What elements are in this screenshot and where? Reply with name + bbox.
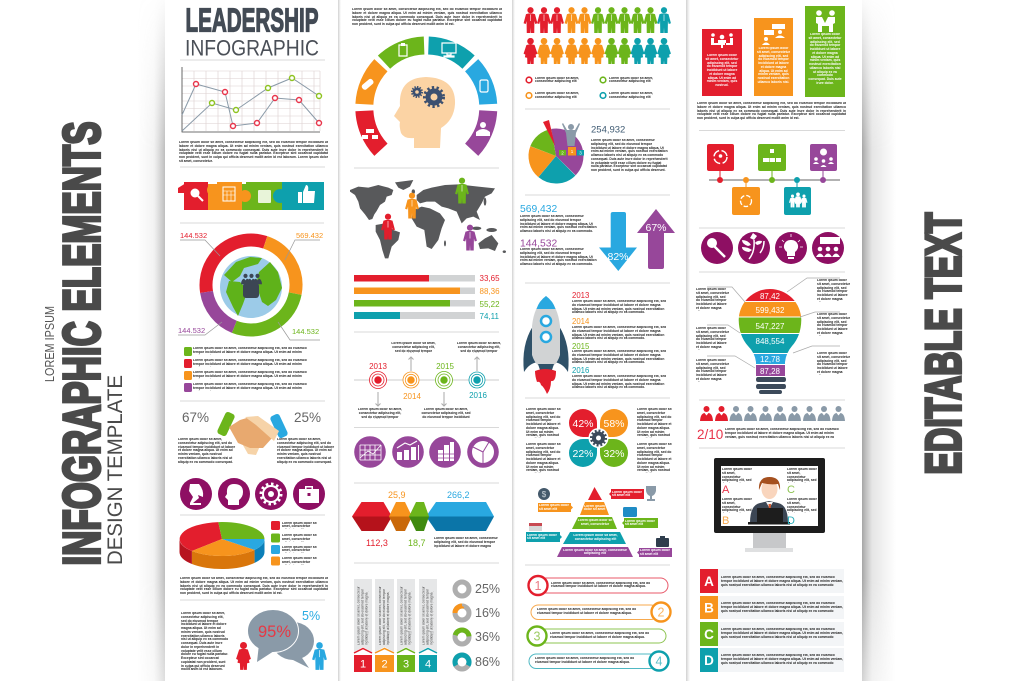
monitor with presenter: A — [722, 484, 730, 496]
icon row: charts — [354, 436, 499, 468]
light bulb chart: 599,432 — [756, 306, 785, 315]
cards: three coloured boxes — [702, 6, 845, 97]
icon: woman — [237, 642, 250, 670]
timeline — [354, 342, 503, 419]
light bulb chart — [696, 278, 850, 394]
icon: winner on podium — [559, 123, 584, 156]
petal percentages: 58% — [603, 418, 625, 430]
people legend — [526, 76, 671, 100]
cards: three coloured boxes: Lorem ipsum dolor sit amet, consectetur adipiscing elit, sed do eiusmod tempor incididunt ut labore et dolore magna aliqua. Ut enim ad minim veniam, quis nostrud. — [706, 54, 738, 87]
timeline: 2013 — [369, 362, 387, 371]
lettered list: A — [704, 574, 714, 589]
monitor with presenter — [714, 458, 825, 552]
icon: people — [241, 274, 262, 298]
figures and arrows: 67% — [645, 222, 667, 234]
handshake stat: 67% — [182, 410, 209, 425]
icon: briefcase — [656, 536, 669, 547]
ring percentages: 36% — [475, 630, 500, 644]
light bulb chart: 547,227 — [756, 322, 785, 331]
panel: column four — [696, 6, 850, 672]
icon: coin: $ — [542, 490, 547, 499]
light bulb chart: 87,42 — [760, 292, 781, 301]
icon: winner on podium: 1 — [571, 149, 574, 154]
ring of segments with head — [339, 20, 514, 195]
year milestones — [572, 291, 669, 390]
figures and arrows: 144,532 — [520, 238, 557, 250]
horizontal bars: 74,11 — [480, 312, 499, 321]
cards: three coloured boxes: Lorem ipsum dolor sit amet, consectetur adipiscing elit, sed do eiusmod tempor incididunt ut labore et dolore magna aliqua. Ut enim ad minim veniam, quis nostrud exercitation ullamco laboris nisi ut aliquip ex ea commodo consequat. Duis aute irure dolor. — [808, 33, 842, 85]
icon row: strategy, head, gear, briefcase — [180, 478, 325, 510]
horizontal bars — [354, 274, 500, 321]
monitor with presenter: B — [722, 515, 729, 527]
donut legend — [184, 347, 313, 392]
petal percentages — [526, 408, 673, 473]
year milestones: 2013 — [572, 291, 589, 300]
horizontal bars: 33,65 — [480, 274, 500, 283]
lettered list: B — [704, 600, 714, 616]
numbered capsules: 1 — [535, 579, 542, 593]
page shadows — [137, 0, 896, 681]
speech bubbles — [248, 609, 320, 668]
panel: column three — [520, 7, 675, 671]
side heading: design template: DESIGN TEMPLATE — [103, 375, 127, 565]
numbered capsules: 2 — [658, 606, 665, 620]
gears — [412, 87, 444, 106]
line chart — [182, 67, 322, 132]
icon: winner on podium: 3 — [579, 150, 582, 156]
donut chart with globe: 569.432 — [296, 231, 323, 240]
petal percentages: 32% — [603, 448, 625, 460]
donut chart with globe: 144.532 — [180, 231, 207, 240]
3D hex arrows: 18,7 — [408, 538, 426, 548]
puzzle strip — [178, 182, 324, 210]
panel: column two — [339, 8, 514, 672]
ring percentages: 25% — [475, 582, 500, 596]
pie chart with podium: Lorem ipsum dolor sit amet, consectetur adipiscing elit, sed do eiusmod tempor incididunt ut labore et dolore magna aliqua. Ut enim ad minim veniam, quis nostrud exercitation ullamco laboris nisi ut aliquip ex ea commodo consequat. Duis aute irure dolor in reprehenderit in voluptate velit esse cillum dolore eu fugiat nulla pariatur. Excepteur sint occaecat cupidatat non proident, sunt in culpa qui officia deserunt. — [591, 139, 668, 172]
lettered list — [700, 569, 844, 672]
figures and arrows: 82% — [607, 251, 629, 263]
icon: calendar — [529, 523, 542, 531]
icon: wallet — [623, 507, 637, 517]
numbered vertical cards: 3 — [403, 658, 409, 670]
horizontal bars: 88,36 — [480, 287, 500, 296]
arrow: down — [599, 212, 637, 271]
year milestones: 2016 — [572, 366, 589, 375]
donut chart with globe: 144.532 — [292, 327, 319, 336]
icon: rocket — [523, 296, 569, 394]
presenter — [748, 477, 790, 524]
icon row: key, plant, bulb, team — [701, 232, 844, 264]
cards: three coloured boxes: Lorem ipsum dolor sit amet, consectetur adipiscing elit, sed do eiusmod tempor incididunt ut labore et dolore magna aliqua. Ut enim ad minim veniam, quis nostrud exercitation ullamco laboris nisi. — [757, 47, 790, 84]
lettered list: D — [704, 653, 714, 668]
globe — [220, 256, 282, 318]
handshake stat — [178, 410, 335, 468]
arrow: up — [637, 209, 675, 269]
light bulb chart: 87,28 — [760, 367, 781, 376]
petal percentages: 22% — [572, 448, 594, 460]
light bulb chart: 12,78 — [760, 355, 781, 364]
timeline: 2016 — [469, 391, 487, 400]
pie chart with podium: 254,932 — [591, 124, 625, 136]
numbered vertical cards: 1 — [360, 658, 366, 670]
monitor with presenter: D — [787, 515, 795, 527]
speech bubbles: 5% — [302, 609, 320, 623]
numbered vertical cards: 2 — [381, 658, 388, 670]
3D hex arrows — [352, 490, 499, 548]
side heading: lorem ipsum: LOREM IPSUM — [43, 306, 57, 382]
head — [394, 77, 455, 148]
title: leadership: LEADERSHIP — [186, 2, 318, 40]
segment icons — [361, 43, 490, 139]
lettered list: C — [704, 627, 714, 642]
side heading: editable text: EDITABLE TEXT — [916, 212, 972, 474]
monitor with presenter: C — [787, 484, 795, 496]
donut chart with globe — [178, 227, 323, 343]
numbered capsules — [528, 576, 670, 670]
icon: winner on podium: 2 — [561, 150, 564, 156]
3D hex arrows: 112,3 — [366, 538, 388, 548]
panel: column one — [178, 2, 335, 672]
year milestones: 2014 — [572, 317, 590, 326]
figures and arrows: 569,432 — [520, 204, 557, 215]
3D hex arrows: 266,2 — [447, 490, 470, 500]
icon: trophy — [646, 486, 656, 501]
numbered capsules: 3 — [534, 630, 541, 644]
figures and arrows — [520, 204, 675, 271]
numbered vertical cards: 4 — [425, 658, 431, 670]
title: infographic: INFOGRAPHIC — [185, 36, 319, 60]
icon: man — [313, 642, 326, 670]
pictogram: 2 of 10 — [697, 406, 845, 442]
pictogram: men — [524, 7, 670, 33]
pictogram: 2 of 10: 2/10 — [697, 427, 723, 442]
icon: coin — [538, 488, 550, 500]
pictogram: women — [524, 38, 670, 64]
pie chart with podium — [537, 120, 668, 176]
handshake stat: 25% — [294, 410, 321, 425]
world map with figures — [350, 178, 506, 258]
speech bubbles: 95% — [258, 623, 291, 641]
timeline: 2014 — [403, 392, 421, 401]
timeline: 2015 — [436, 362, 454, 371]
pyramid — [526, 486, 672, 557]
horizontal bars: 55,22 — [480, 300, 500, 309]
text block: Lorem ipsum dolor sit amet, consectetur adipiscing elit, sed do eiusmod tempor incididunt ut labore et dolore magna aliqua. Ut enim ad minim veniam, quis nostrud exercitation ullamco laboris nisi ut aliquip ex ea commodo consequat. Duis aute irure dolor in reprehenderit in voluptate velit esse cillum dolore eu fugiat nulla pariatur. Excepteur sint occaecat cupidatat non proident, sunt in culpa qui officia deserunt mollit anim id est laborum. — [181, 612, 228, 671]
numbered capsules: 4 — [656, 654, 663, 668]
petal percentages: 42% — [572, 418, 594, 430]
3D hex arrows: 25,9 — [388, 490, 406, 500]
ring percentages — [452, 582, 500, 672]
icon: handshake — [216, 411, 289, 455]
numbered vertical cards — [354, 579, 437, 672]
3D pie chart — [180, 522, 264, 569]
ring percentages: 16% — [475, 606, 500, 620]
donut chart with globe: 144.532 — [178, 326, 205, 335]
ring percentages: 86% — [475, 655, 500, 669]
pie legend — [271, 521, 325, 566]
light bulb chart: 848,554 — [756, 337, 785, 346]
process timeline — [707, 144, 840, 215]
year milestones: 2015 — [572, 342, 590, 351]
